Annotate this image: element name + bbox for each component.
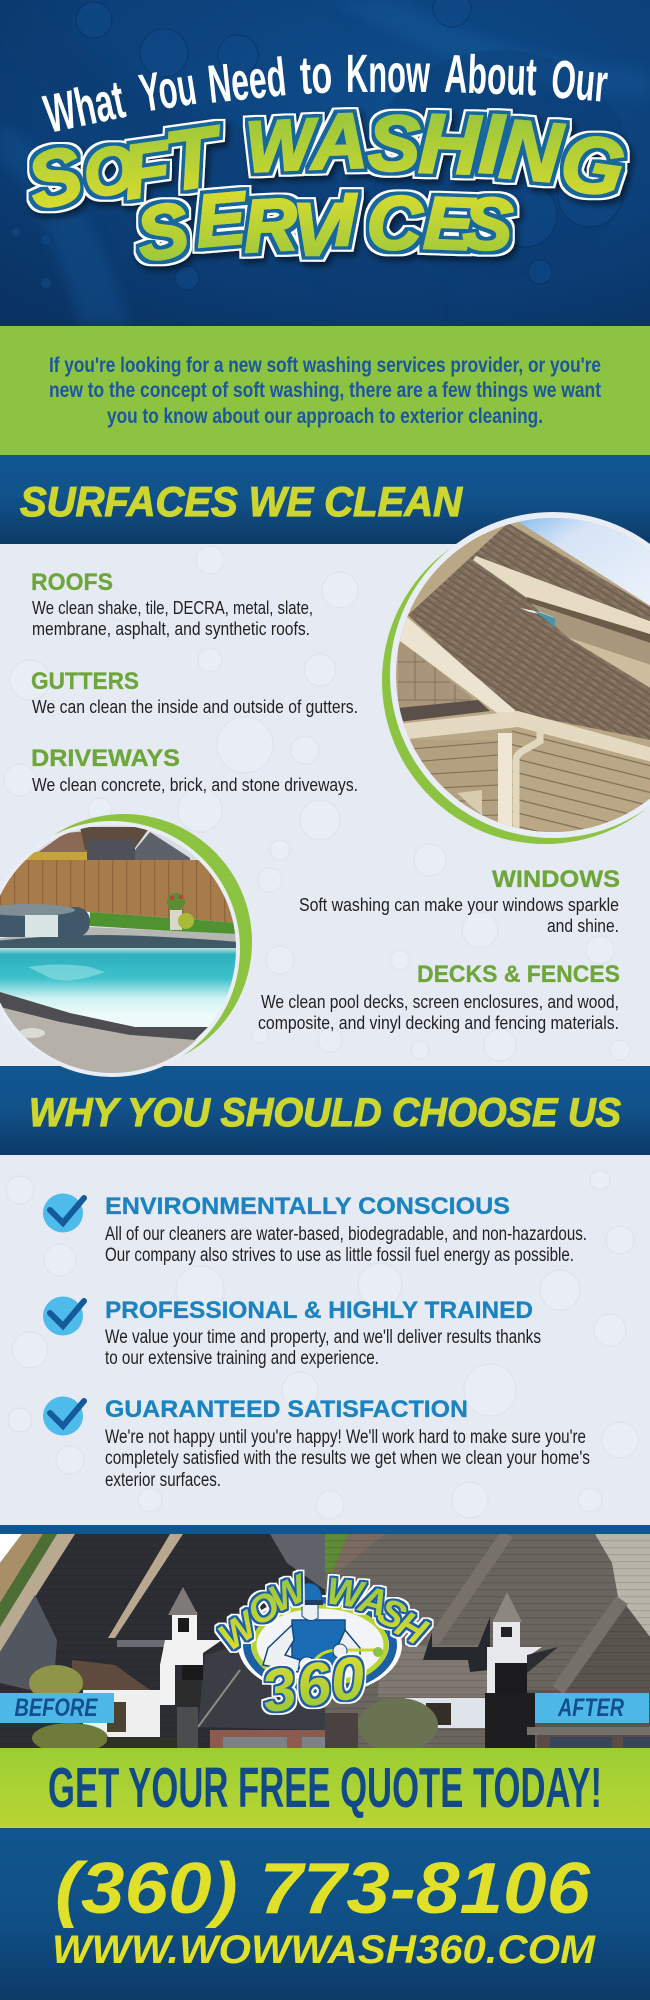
item: guaranteed satisfaction: exterior surfaces.: [105, 1470, 221, 1491]
website: WWW.WOWWASH360.COM: [52, 1928, 597, 1972]
photo: before roof: [0, 1534, 325, 1753]
logo text: 360: 6: [292, 1649, 335, 1720]
heading text: SURFACES WE CLEAN: [20, 478, 464, 525]
text: gutters: [31, 668, 358, 717]
title: soft washing: I: [477, 96, 507, 191]
logo text: wash: W: [324, 1570, 368, 1617]
title: soft washing: A: [308, 96, 369, 186]
badge: after: AFTER: [557, 1694, 624, 1722]
title: services: I: [335, 178, 357, 261]
text: decks and fences: DECKS & FENCES: [417, 961, 620, 988]
text: roofs: membrane, asphalt, and synthetic roofs.: [32, 619, 310, 639]
text: driveways: [31, 745, 358, 795]
logo text: wash: A: [354, 1578, 392, 1626]
panel: hero background: [0, 0, 650, 326]
title: soft washing: S: [368, 99, 420, 187]
panel: why choose us background: [0, 1155, 650, 1525]
title: soft washing: S: [19, 129, 91, 226]
title: what you need to know: You: [135, 56, 200, 124]
item: professional and highly trained: We value your time and property, and we'll deliver results thanks: [105, 1327, 541, 1348]
divider strip: [0, 1525, 650, 1534]
panel: surfaces background: [0, 544, 650, 1066]
logo text: wash: H: [388, 1603, 435, 1654]
title: what you need to know: to: [298, 44, 334, 106]
title: what you need to know: [39, 44, 610, 145]
icon: check: [43, 1194, 84, 1232]
heading text: WHY YOU SHOULD CHOOSE US: [29, 1091, 621, 1135]
title: services: R: [241, 182, 299, 268]
title: what you need to know: Our: [549, 49, 610, 114]
logo text: wash: S: [371, 1590, 412, 1639]
title: soft washing: T: [159, 108, 230, 209]
text: gutters: GUTTERS: [31, 668, 139, 695]
text: roofs: ROOFS: [31, 569, 113, 596]
text: decks and fences: [258, 961, 620, 1033]
title: soft washing: H: [417, 96, 484, 192]
item: professional and highly trained: PROFESSIONAL & HIGHLY TRAINED: [105, 1297, 533, 1324]
icon: check: [43, 1396, 84, 1436]
intro text: [49, 354, 601, 428]
text: windows: WINDOWS: [492, 866, 620, 893]
item: professional and highly trained: to our extensive training and experience.: [105, 1348, 379, 1369]
text: roofs: [31, 569, 313, 639]
logo text: wow: W: [263, 1567, 316, 1621]
title: what you need to know: Know: [346, 44, 431, 104]
photo: after roof: [325, 1534, 650, 1752]
panel: contact: [0, 1828, 650, 2000]
item: guaranteed satisfaction: GUARANTEED SATISFACTION: [105, 1396, 468, 1423]
title: services: E: [422, 181, 477, 266]
item: environmentally conscious: [43, 1193, 587, 1266]
logo text: wow: O: [240, 1584, 287, 1635]
text: gutters: We can clean the inside and outside of gutters.: [32, 697, 358, 717]
photo: roof and gutters: [382, 510, 650, 844]
title: services: E: [192, 176, 251, 263]
panel: intro: [0, 326, 650, 455]
logo text: 360: 3: [257, 1654, 301, 1726]
text: driveways: We clean concrete, brick, and stone driveways.: [32, 775, 358, 795]
intro text: you to know about our approach to exterior cleaning.: [107, 405, 543, 428]
text: driveways: DRIVEWAYS: [31, 745, 180, 772]
item: guaranteed satisfaction: [43, 1396, 590, 1491]
title: services: S: [461, 181, 515, 267]
phone number: (360) 773-8106: [55, 1849, 591, 1929]
item: professional and highly trained: [43, 1296, 541, 1369]
title: what you need to know: About: [444, 44, 538, 107]
text: windows: and shine.: [547, 916, 619, 936]
title: what you need to know: What: [39, 69, 130, 145]
title: services: S: [130, 186, 195, 279]
title: what you need to know: Need: [205, 47, 289, 115]
logo text: 360: 0: [327, 1644, 368, 1714]
title: services: V: [292, 188, 347, 271]
title: soft washing: O: [78, 130, 141, 212]
heading band: why you should choose us: [0, 1066, 650, 1155]
text: roofs: We clean shake, tile, DECRA, metal, slate,: [32, 598, 313, 618]
title: soft washing: F: [118, 125, 178, 216]
item: environmentally conscious: ENVIRONMENTALLY CONSCIOUS: [105, 1193, 510, 1220]
text: windows: [299, 866, 620, 936]
title: soft washing: G: [556, 117, 630, 213]
logo: wow wash 360: [212, 1567, 435, 1726]
title: services: C: [365, 180, 424, 267]
icon: check: [43, 1296, 84, 1336]
worker figure: [263, 1583, 383, 1673]
heading band: surfaces we clean: [0, 455, 650, 544]
photo: pool and fence: [0, 814, 252, 1090]
badge: after: [535, 1693, 649, 1723]
badge: before: BEFORE: [14, 1694, 99, 1722]
call to action band: [0, 1748, 650, 1828]
title: soft washing: N: [496, 101, 567, 200]
title: soft washing: W: [244, 104, 322, 188]
logo text: wow: W: [212, 1603, 267, 1659]
